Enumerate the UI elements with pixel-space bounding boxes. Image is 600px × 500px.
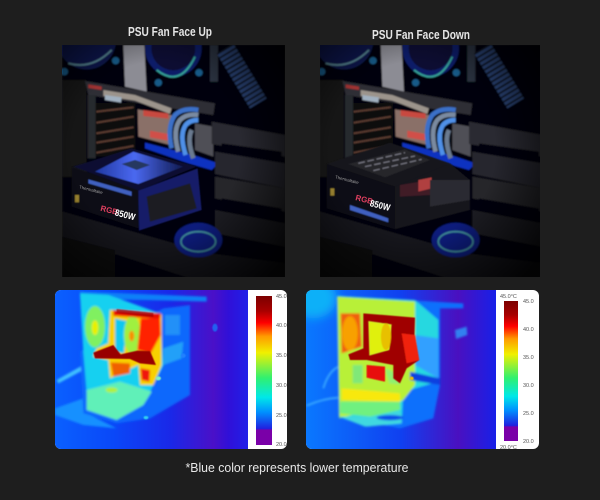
PSU with glowing blue top fan: 850W <box>114 208 136 222</box>
colour scale: 25.0 <box>523 411 534 417</box>
colour scale: 20.0 <box>276 442 287 448</box>
caption: *Blue color represents lower temperature <box>186 460 408 475</box>
colour scale: 45.0 <box>276 294 287 300</box>
PSU with glowing blue top fan: Thermaltake <box>79 184 104 195</box>
PSU with glowing blue top fan: RGB <box>100 204 119 217</box>
colour scale: 30.0 <box>523 383 534 389</box>
colour scale: 20.0°C <box>500 445 517 451</box>
PSU with dark label side up: 850W <box>369 198 391 213</box>
thermal map: hot spots around the graphics card <box>55 292 207 428</box>
colour scale: 35.0 <box>523 355 534 361</box>
PSU with dark label side up <box>327 143 470 229</box>
PSU with dark label side up: RGB <box>355 193 374 206</box>
panel: photo of PSU fan facing up <box>62 45 285 277</box>
colour scale: 40.0 <box>523 327 534 333</box>
panel: thermal image, PSU fan facing down <box>306 290 539 449</box>
heading: PSU Fan Face Down: PSU Fan Face Down <box>372 28 470 42</box>
panel: photo of PSU fan facing down <box>320 45 540 277</box>
panel: thermal image, PSU fan facing up <box>55 290 287 449</box>
PSU with dark label side up: Thermaltake <box>335 174 360 185</box>
colour scale: 30.0 <box>276 383 287 389</box>
colour scale: 45.0°C <box>500 294 517 300</box>
colour scale <box>256 294 287 448</box>
colour scale: 35.0 <box>276 353 287 359</box>
colour scale: 20.0 <box>523 439 534 445</box>
colour scale: 40.0 <box>276 323 287 329</box>
colour scale: 25.0 <box>276 413 287 419</box>
heading: PSU Fan Face Up: PSU Fan Face Up <box>128 25 212 39</box>
colour scale <box>500 294 534 451</box>
thermal map: larger hot area and warmer PSU zone <box>306 290 342 323</box>
PSU with glowing blue top fan <box>72 148 202 231</box>
colour scale: 45.0 <box>523 299 534 305</box>
